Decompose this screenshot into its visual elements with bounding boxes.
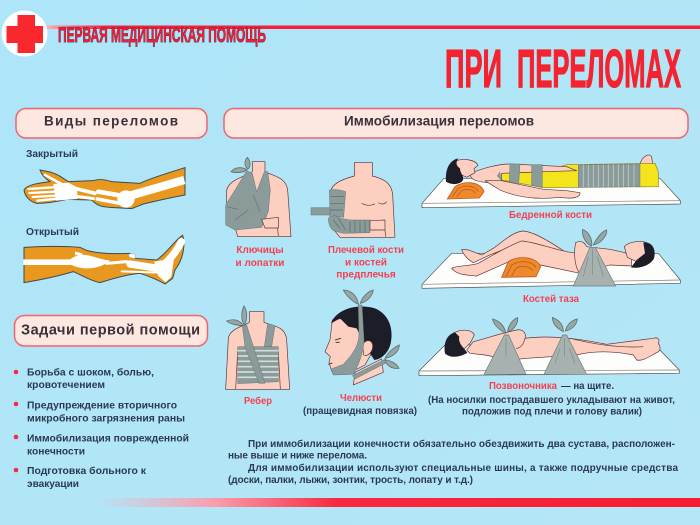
- label: pelvis: Костей таза: [523, 294, 579, 305]
- illustration: rib bandage: [226, 306, 290, 389]
- task: prevent contamination: Предупреждение вторичного: [27, 400, 177, 412]
- label: closed fracture: Закрытый: [26, 149, 78, 160]
- illustration: sling for collarbone: [226, 157, 291, 237]
- title: [445, 39, 681, 99]
- task: immobilize limb: [14, 432, 189, 458]
- panel heading: types of fractures: [16, 108, 207, 138]
- task: prepare evacuation: Подготовка больного к: [27, 465, 147, 477]
- first aid task list: [14, 366, 189, 490]
- label: collarbone and shoulder blade: и лопатки: [236, 258, 284, 269]
- illustration: pelvis fracture position: [422, 229, 680, 288]
- label: upper arm and forearm bones: [328, 245, 404, 280]
- icon: red cross: [2, 10, 48, 56]
- note text: Для иммобилизации используют специальные шины, а также подручные средства: [248, 462, 678, 474]
- label: spine caption: подложив под плечи и голову валик): [462, 406, 642, 418]
- label: upper arm and forearm bones: предплечья: [336, 270, 396, 280]
- illustration: closed arm fracture: [24, 168, 185, 209]
- label: spine caption: — на щите.: [561, 381, 614, 392]
- header label: ПЕРВАЯ МЕДИЦИНСКАЯ ПОМОЩЬ: [58, 24, 266, 47]
- label: spine caption: [428, 381, 675, 418]
- label: spine caption: (На носилки пострадавшего укладывают на живот,: [428, 395, 675, 406]
- top header line: [45, 26, 700, 29]
- task: fight shock: [14, 366, 154, 391]
- label: jaw: Челюсти: [340, 393, 382, 404]
- label: collarbone and shoulder blade: [236, 245, 284, 269]
- illustration: femur splint: [422, 155, 680, 208]
- label: open fracture: Открытый: [26, 227, 79, 238]
- label: collarbone and shoulder blade: Ключицы: [236, 245, 284, 256]
- task: prevent contamination: микробного загрязнения раны: [27, 412, 185, 424]
- task: prepare evacuation: [14, 465, 147, 490]
- illustration: open leg fracture: [23, 235, 184, 284]
- note text: При иммобилизации конечности обязательно обездвижить два сустава, расположен-: [248, 438, 675, 450]
- label: femur: Бедренной кости: [509, 210, 592, 221]
- task: immobilize limb: Иммобилизация поврежденной: [27, 432, 189, 444]
- note text: (доски, палки, лыжи, зонтик, трость, лопату и т.д.): [228, 475, 473, 486]
- illustration: jaw bandage: [325, 290, 399, 385]
- illustration: spine fracture on a board: [419, 317, 679, 376]
- bottom gradient bar: [95, 498, 700, 507]
- task: immobilize limb: конечности: [27, 446, 85, 458]
- panel heading: first aid tasks: [14, 316, 208, 346]
- panel heading: types of fractures: Виды переломов: [44, 114, 178, 128]
- panel heading: immobilization: Иммобилизация переломов: [344, 114, 534, 128]
- note text: [228, 438, 678, 486]
- task: fight shock: кровотечением: [27, 380, 105, 391]
- label: spine caption: Позвоночника: [489, 381, 557, 392]
- label: jaw: [303, 393, 417, 417]
- illustration: upper arm and forearm bandage: [311, 163, 395, 237]
- task: prepare evacuation: эвакуации: [27, 479, 79, 490]
- title: ПРИ: [445, 39, 502, 99]
- task: fight shock: Борьба с шоком, болью,: [27, 366, 154, 378]
- label: jaw: (пращевидная повязка): [303, 406, 417, 417]
- panel heading: immobilization: [224, 108, 688, 138]
- label: ribs: Ребер: [244, 395, 272, 407]
- panel heading: first aid tasks: Задачи первой помощи: [21, 322, 200, 338]
- label: upper arm and forearm bones: Плечевой кости: [328, 245, 404, 256]
- note text: ные выше и ниже перелома.: [228, 450, 367, 462]
- label: upper arm and forearm bones: и костей: [345, 258, 387, 268]
- task: prevent contamination: [14, 400, 185, 424]
